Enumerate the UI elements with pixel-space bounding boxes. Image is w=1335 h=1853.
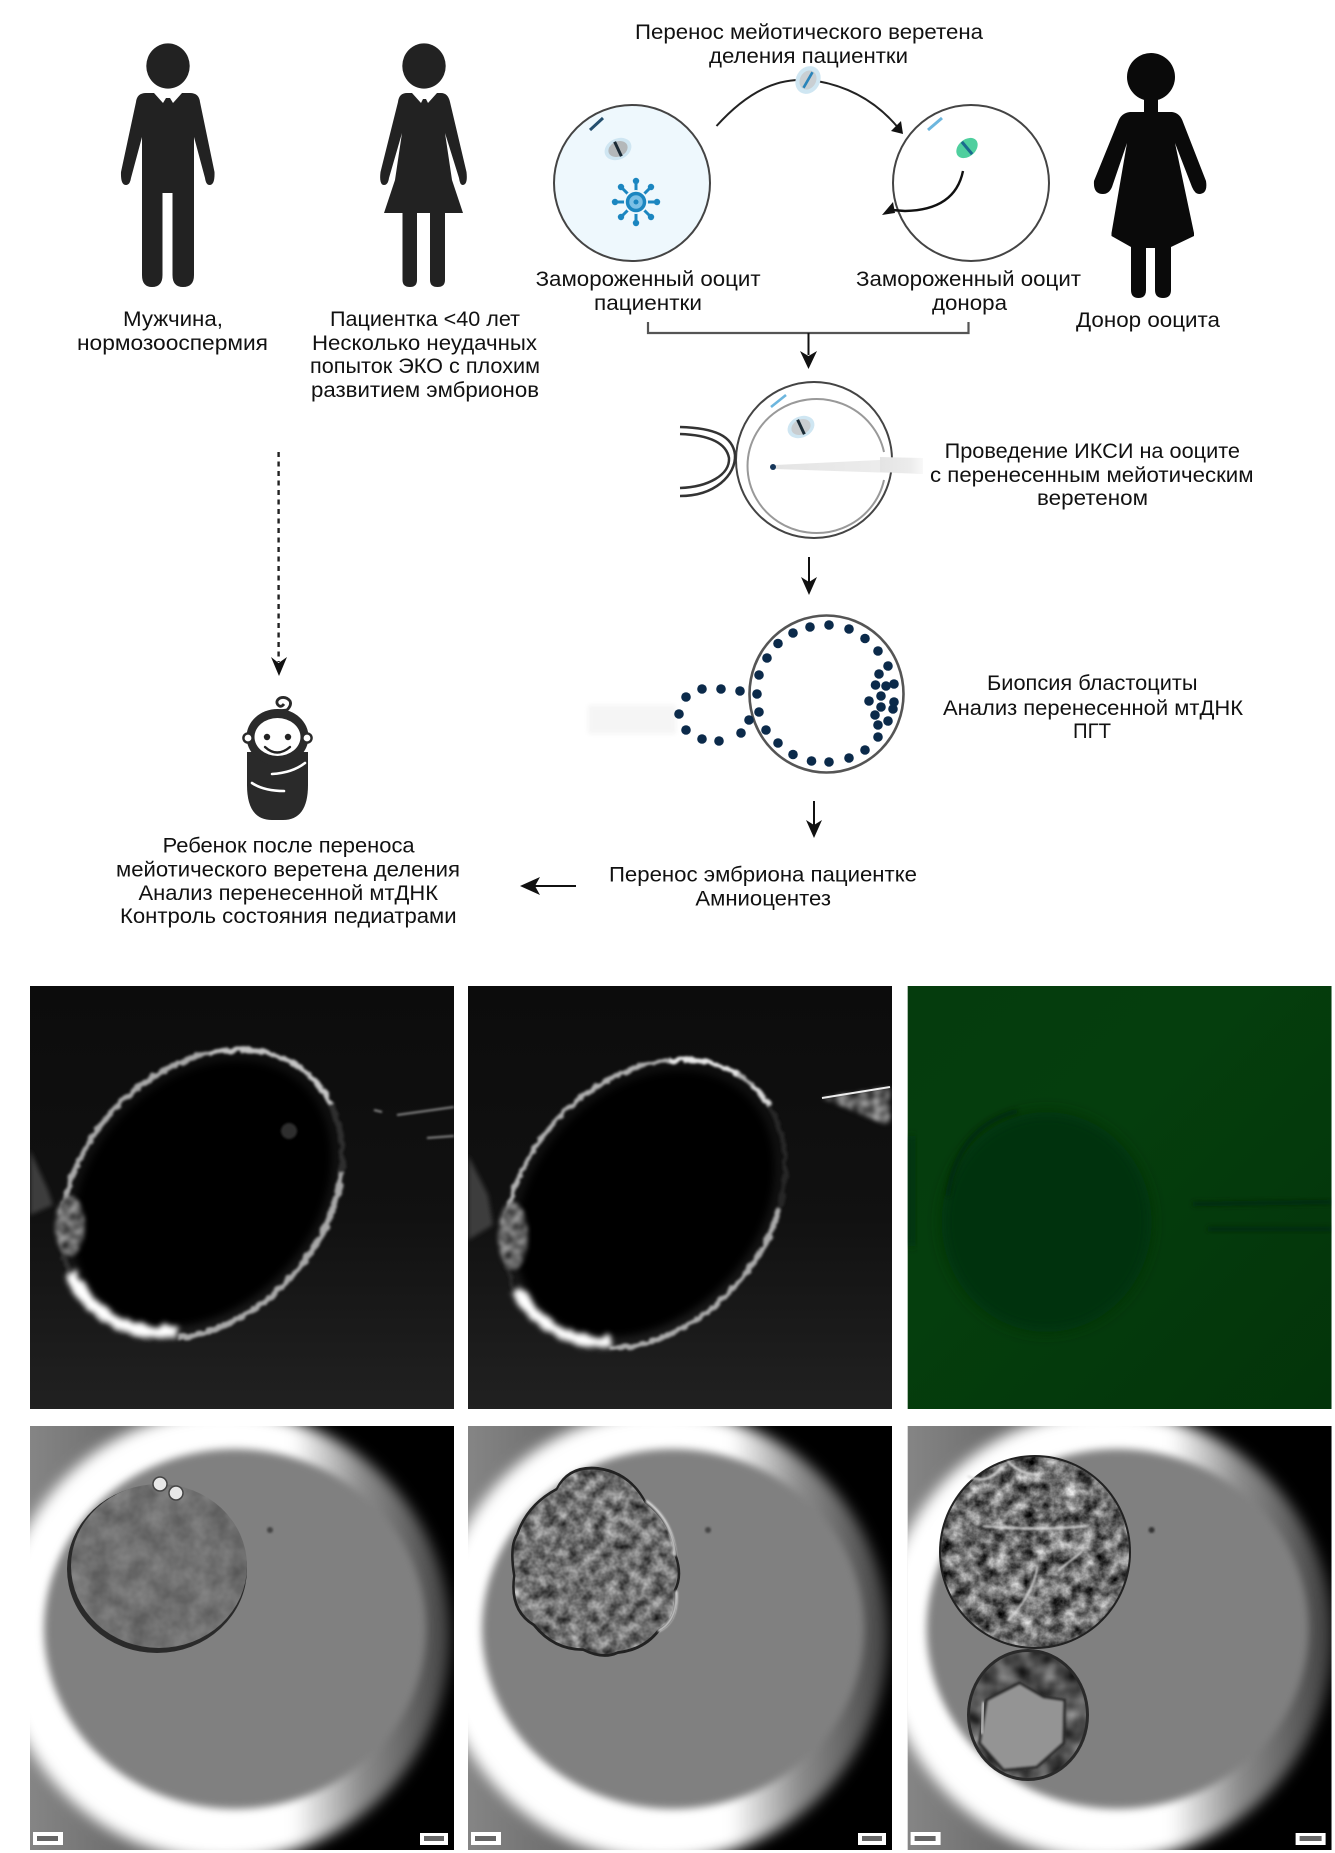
arrow: spindle removal <box>882 171 963 215</box>
arrow: blastocyst to transfer <box>806 801 822 838</box>
icon: ICSI spindle <box>784 412 818 442</box>
heading: spindle transfer: Перенос мейотического веретена <box>635 21 983 44</box>
icon: patient spindle <box>601 134 635 164</box>
label: child <box>116 835 460 928</box>
label: patient: попыток ЭКО с плохим <box>310 355 540 378</box>
label: biopsy: Биопсия бластоциты <box>987 672 1198 695</box>
label: ICSI: веретеном <box>1037 487 1148 510</box>
bracket and arrow to ICSI <box>648 322 968 369</box>
label: ICSI: с перенесенным мейотическим <box>930 464 1254 487</box>
figure: oocyte donor <box>1094 53 1206 298</box>
icon: nucleus star <box>612 178 660 226</box>
label: donor oocyte <box>856 268 1081 315</box>
panel: blastocyst biopsy <box>588 616 904 772</box>
arrow: dashed man to child <box>271 452 287 676</box>
label: donor oocyte: Замороженный ооцит <box>856 268 1081 291</box>
icon: swaddled baby <box>243 697 312 820</box>
photo: hatching blastocyst brightfield <box>883 1411 1333 1853</box>
label: child: Ребенок после переноса <box>163 835 415 858</box>
label: donor oocyte: донора <box>932 292 1007 315</box>
icon: holding pipette <box>680 427 735 496</box>
icon: polar body <box>590 118 603 130</box>
label: patient: Пациентка <40 лет <box>330 308 520 331</box>
label: patient: Несколько неудачных <box>312 332 538 355</box>
photo: green fluorescence <box>908 986 1332 1410</box>
scale labels <box>911 1832 1326 1845</box>
icon: donor spindle <box>952 134 982 162</box>
label: embryo transfer: Перенос эмбриона пациентке <box>609 864 917 886</box>
label: ICSI: Проведение ИКСИ на ооците <box>945 440 1240 463</box>
blastocyst <box>939 1455 1131 1649</box>
label: child: Анализ перенесенной мтДНК <box>138 882 439 905</box>
heading: spindle transfer <box>635 21 983 68</box>
heading: spindle transfer: деления пациентки <box>709 45 908 68</box>
panel: ICSI oocyte <box>680 382 923 538</box>
label: patient: развитием эмбрионов <box>311 379 539 402</box>
scale labels <box>471 1832 886 1845</box>
arrow: transfer to child <box>520 877 576 895</box>
label: man: нормозооспермия <box>77 332 268 355</box>
icon: needle <box>775 458 923 474</box>
photo: polarized oocyte 2 <box>447 986 892 1410</box>
photo: oocyte brightfield <box>30 1426 454 1850</box>
icon: ICSI polar body <box>771 395 786 407</box>
photo: morula brightfield <box>468 1426 892 1850</box>
cell <box>67 1477 247 1653</box>
label: biopsy <box>943 672 1244 743</box>
icon: transferred spindle <box>790 61 826 99</box>
icon: sperm <box>770 464 776 470</box>
label: embryo transfer <box>609 864 917 911</box>
label: child: Контроль состояния педиатрами <box>120 905 457 928</box>
label: patient <box>310 308 540 402</box>
label: man: Мужчина, <box>123 308 223 331</box>
label: patient oocyte <box>536 268 761 315</box>
label: man <box>77 308 268 355</box>
label: patient oocyte: Замороженный ооцит <box>536 268 761 291</box>
photo: polarized oocyte 1 <box>4 986 454 1410</box>
scale labels <box>33 1832 448 1845</box>
hatched cells <box>967 1649 1089 1781</box>
arrow: ICSI to blastocyst <box>801 557 817 595</box>
label: embryo transfer: Амниоцентез <box>695 888 831 911</box>
label: ICSI <box>930 440 1254 510</box>
panel: donor oocyte <box>882 105 1049 261</box>
figure: man <box>121 43 215 287</box>
arrow: spindle transfer arc <box>716 80 903 134</box>
label: oocyte donor: Донор ооцита <box>1076 309 1220 332</box>
label: patient oocyte: пациентки <box>594 292 702 315</box>
cell <box>511 1467 680 1657</box>
label: biopsy: Анализ перенесенной мтДНК <box>943 697 1244 720</box>
label: child: мейотического веретена деления <box>116 859 460 882</box>
label: biopsy: ПГТ <box>1073 720 1111 743</box>
icon: donor polar body <box>928 118 942 130</box>
panel: patient oocyte <box>554 105 710 261</box>
figure: patient <box>380 43 467 287</box>
trophectoderm and biopsied cells <box>674 620 899 767</box>
